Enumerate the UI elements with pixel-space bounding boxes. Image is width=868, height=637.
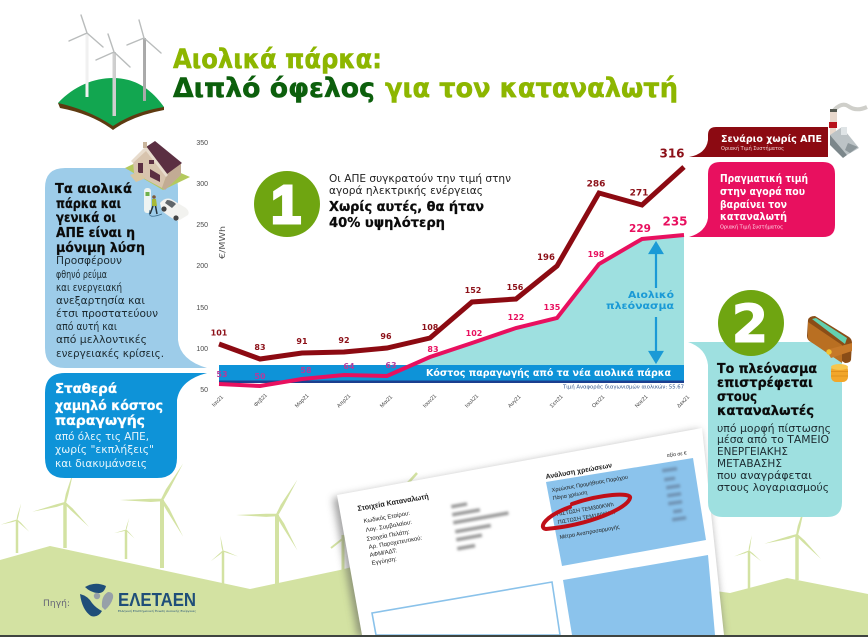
x axis: Μαι21 [379, 394, 394, 409]
panel: actual market price: Οριακή Τιμή Συστήματος [720, 224, 783, 230]
text block: renewables restrain price [329, 173, 511, 231]
text block: renewables restrain price: Οι ΑΠΕ συγκρατούν την τιμή στην [329, 173, 511, 185]
panel: actual market price: Πραγματική τιμή [720, 173, 808, 185]
body: ΕΝΕΡΓΕΙΑΚΗΣ [717, 446, 788, 458]
consumer details block: Στοιχεία Καταναλωτή [357, 492, 430, 513]
panel: actual market price [689, 162, 835, 237]
panel: actual market price: στην αγορά που [720, 186, 805, 198]
title [173, 44, 678, 104]
panel: scenario without renewables: Οριακή Τιμή Συστήματος [721, 145, 784, 152]
dark red values: 83 [254, 343, 266, 352]
person [152, 195, 156, 199]
invoice document: Αρ. Παροχετευτικού: [368, 536, 423, 551]
invoice document: ΑΦΜ/ΑΔΤ: [369, 548, 398, 559]
panel: permanent solution [45, 168, 207, 368]
body: μέσα από το ΤΑΜΕΙΟ [717, 434, 829, 446]
panel: surplus returned to consumers [688, 342, 842, 517]
arrow: up [650, 243, 662, 288]
car [160, 198, 189, 221]
x axis: Μαρ21 [294, 393, 310, 409]
red highlight ellipse [543, 495, 630, 529]
text block: renewables restrain price: 40% υψηλότερη [329, 216, 445, 231]
dark red values: 108 [422, 323, 439, 332]
production cost band [219, 365, 684, 381]
chimney [143, 142, 147, 148]
y axis: 200 [196, 263, 208, 270]
dark red values: 316 [659, 146, 685, 160]
background hills and turbines [0, 445, 868, 636]
y axis: 150 [196, 305, 208, 312]
icon: wind turbines on hill [58, 15, 164, 130]
pink values: 83 [427, 345, 439, 354]
body: φθηνό ρεύμα [56, 269, 107, 281]
invoice document: Κωδικός Εταίρου: [363, 510, 411, 525]
x axis: Ιαν21 [211, 395, 225, 408]
heading [55, 381, 163, 429]
wind surplus label: πλεόνασμα [606, 300, 674, 312]
dark red values: 101 [211, 328, 228, 338]
x axis: Φεβ21 [253, 393, 269, 408]
body: υπό μορφή πίστωσης [717, 423, 831, 435]
roof [146, 141, 182, 174]
x axis: Σεπ21 [549, 394, 565, 409]
badge 2: 2 [732, 294, 768, 355]
body: έτσι προστατεύουν [56, 308, 158, 320]
x axis: Δεκ21 [676, 395, 691, 409]
x axis: Απρ21 [336, 393, 352, 409]
surplus area [412, 235, 684, 366]
icon: house and electric car [125, 141, 190, 221]
body: στους λογαριασμούς [717, 482, 829, 494]
panel: actual market price: καταναλωτή [720, 211, 787, 223]
dark red values: 91 [296, 337, 308, 346]
invoice document [333, 428, 724, 637]
y axis: 50 [200, 387, 208, 394]
heading: ΑΠΕ είναι η [56, 225, 135, 241]
heading [55, 181, 145, 256]
charges list: ΠΙΣΤΩΣΗ ΤΕΜ300KWh [556, 502, 614, 518]
x axis [211, 393, 691, 409]
panel: scenario without renewables: Σενάριο χωρίς ΑΠΕ [721, 133, 822, 145]
heading: καταναλωτές [717, 403, 814, 419]
wind surplus label: Αιολικό [628, 289, 674, 301]
charges heading: Ανάλυση χρεώσεων [545, 461, 613, 481]
badge 1: 1 [271, 175, 301, 235]
title: Διπλό όφελος [173, 73, 375, 104]
y axis: 300 [196, 181, 208, 188]
x axis: Αυγ21 [507, 394, 522, 409]
heading: Τα αιολικά [55, 181, 132, 197]
charges list: αξία σε € [667, 451, 687, 459]
heading: πάρκα και [56, 196, 121, 212]
pink values: 122 [508, 313, 524, 322]
heading: Σταθερά [55, 381, 117, 397]
title: για τον καταναλωτή [385, 73, 678, 104]
badge 2 [718, 290, 784, 356]
body: από αυτή και [56, 321, 117, 333]
pink values [216, 214, 688, 381]
body: ενεργειακές κρίσεις. [56, 348, 164, 360]
body: από όλες τις ΑΠΕ, [55, 431, 149, 443]
badge 1 [254, 171, 320, 237]
heading: παραγωγής [55, 413, 145, 429]
panel: actual market price: βαραίνει τον [720, 199, 787, 211]
lawn [125, 158, 190, 190]
heading: χαμηλό κόστος [55, 398, 163, 414]
charges list [551, 451, 687, 541]
pink values: 235 [662, 214, 688, 228]
heading: Το πλεόνασμα [717, 361, 817, 377]
y axis: 250 [196, 222, 208, 229]
pink values: 64 [343, 362, 355, 371]
pink values: 229 [629, 223, 651, 235]
charges list: ΠΙΣΤΩΣΗ ΤΕΜ180KWh [557, 510, 615, 526]
charges list: Πάγια χρέωση [552, 489, 588, 502]
body: ανεξαρτησία και [56, 295, 145, 307]
heading [717, 361, 817, 419]
body: από μελλοντικές [56, 334, 147, 346]
text block: renewables restrain price: Χωρίς αυτές, θα ήταν [329, 200, 484, 215]
invoice document: Λογ. Συμβολαίου: [365, 520, 413, 534]
pink values: 63 [385, 361, 397, 370]
line chart [196, 140, 691, 409]
pink values: 58 [300, 366, 312, 375]
charges list: Μέτρα Αναπροσαρμογής [559, 523, 620, 541]
body: και διακυμάνσεις [55, 458, 147, 470]
outlined box [372, 582, 560, 635]
lower blue panel [563, 555, 715, 635]
title: Αιολικά πάρκα: [173, 44, 382, 75]
body: ΜΕΤΑΒΑΣΗΣ [717, 458, 782, 470]
x axis: Ιουν21 [422, 394, 438, 409]
wind surplus label [606, 289, 674, 312]
y axis title: €/MWh [218, 226, 227, 259]
body: που αναγράφεται [717, 470, 812, 482]
body [717, 423, 831, 494]
y axis: 350 [196, 140, 208, 147]
arrow: down [650, 317, 662, 362]
pink line: actual market price [219, 235, 684, 386]
invoice document: Εγγύηση: [371, 557, 398, 567]
pink values: 53 [216, 370, 228, 379]
source and logo: Πηγή: [43, 599, 70, 609]
dark red values: 92 [338, 336, 350, 345]
x axis: Οκτ21 [591, 394, 606, 409]
body [56, 255, 164, 360]
windows and door [138, 163, 143, 173]
x axis: Νοε21 [634, 394, 649, 409]
text block: renewables restrain price: αγορά ηλεκτρικής ενέργειας [329, 185, 483, 197]
dark red values: 152 [465, 286, 481, 295]
dark red values: 96 [380, 332, 392, 341]
body [55, 431, 154, 470]
heading: στους [717, 389, 757, 405]
dark red values [211, 146, 685, 352]
charges list: Χρεώσεις Προμήθειας Παρόχου [551, 474, 628, 494]
heading: επιστρέφεται [717, 375, 813, 391]
body: χωρίς "εκπλήξεις" [55, 444, 154, 456]
charges blue panel [546, 458, 706, 566]
house walls [133, 147, 167, 188]
dark red line: scenario without renewables [219, 167, 684, 359]
heading: μόνιμη λύση [56, 240, 145, 256]
dark red values: 286 [587, 180, 605, 190]
band label: Κόστος παραγωγής από τα νέα αιολικά πάρκα [426, 367, 671, 379]
heading: γενικά οι [56, 210, 116, 226]
source and logo: Ελληνική Επιστημονική Ένωση Αιολικής Ενέργειας [118, 609, 196, 613]
panel: stable low cost [45, 373, 207, 478]
pink values: 135 [544, 303, 561, 312]
pink values: 50 [254, 372, 266, 381]
charger [144, 188, 151, 213]
invoice document: Στοιχεία Πελάτη: [366, 528, 410, 543]
dark red values: 271 [630, 188, 648, 198]
pink values: 198 [588, 250, 605, 259]
pink values: 102 [466, 329, 482, 338]
body: Προσφέρουν [56, 255, 122, 267]
x axis: Ιουλ21 [464, 394, 480, 409]
icon: power plant with smoke [829, 105, 867, 158]
dark red values: 156 [507, 283, 524, 292]
icon: wallet with coins [807, 316, 852, 382]
y axis: 100 [196, 346, 208, 353]
panel: scenario without renewables [689, 127, 828, 157]
reference price note: Τιμή Αναφοράς διαγωνισμών αιολικών: 55.67 [562, 384, 684, 390]
body: και ενεργειακή [56, 282, 122, 294]
logo wordmark: ΕΛΕΤΑΕΝ [118, 590, 196, 610]
y axis [196, 140, 208, 394]
dark red values: 196 [537, 253, 555, 263]
logo mark [80, 584, 113, 616]
source and logo [43, 584, 196, 616]
